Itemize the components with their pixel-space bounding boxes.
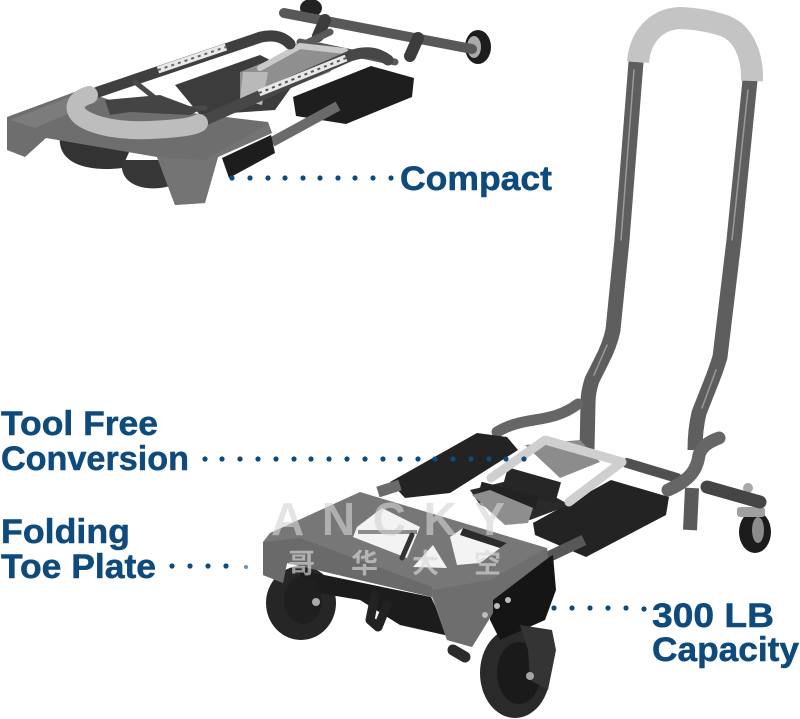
dark wheels under plate — [60, 135, 170, 188]
plate bolts — [482, 597, 511, 618]
front wheel tyre — [480, 628, 550, 718]
left folded tube — [98, 36, 290, 92]
grey foam grip — [76, 95, 199, 130]
dark detail inside grip — [105, 95, 200, 115]
label: compact — [229, 160, 552, 198]
dotted leader: compact — [229, 175, 394, 181]
black hinge bracket — [222, 135, 275, 178]
heading: tool free conversion: Tool Free — [1, 405, 158, 443]
grey support tube — [272, 106, 338, 142]
heading: 300 lb capacity — [652, 597, 799, 669]
left wheel hub — [284, 576, 322, 624]
watermark: 华 — [351, 549, 378, 579]
heading: tool free conversion: Conversion — [1, 440, 189, 478]
black frame bracket — [490, 555, 556, 640]
black platform pad — [293, 66, 414, 124]
toe plate — [7, 90, 272, 205]
handle tubes — [587, 62, 636, 450]
light grey fold handle — [260, 46, 345, 68]
dotted leader: tool free conversion — [202, 456, 527, 462]
wheel fork — [520, 625, 556, 690]
heading: folding toe plate — [1, 513, 156, 586]
heading: 300 lb capacity: 300 LB — [652, 597, 774, 635]
upright hand truck — [263, 18, 771, 718]
lower frame tube — [548, 540, 584, 557]
folded compact cart — [7, 0, 491, 205]
label: tool free conversion — [1, 405, 527, 478]
rear caster wheels — [300, 0, 491, 64]
heading: 300 lb capacity: Capacity — [652, 631, 799, 669]
label: folding toe plate — [1, 513, 248, 586]
left rear wheel — [266, 566, 336, 640]
heading: folding toe plate: Toe Plate — [1, 548, 156, 586]
light foam handle grip — [638, 18, 752, 81]
tube highlights — [594, 70, 748, 408]
heading: folding toe plate: Folding — [1, 513, 130, 551]
watermark: 大 — [412, 549, 439, 579]
curved rear rails — [497, 404, 578, 432]
watermark: ANCKY — [271, 493, 505, 545]
dotted leader: 300 lb capacity — [551, 605, 647, 612]
heading: compact: Compact — [400, 160, 552, 198]
central rollers — [470, 440, 600, 525]
rear caster — [737, 483, 771, 553]
underside mechanism — [300, 570, 449, 636]
watermark: 哥 — [288, 549, 315, 579]
watermark — [271, 493, 505, 579]
sticker labels — [158, 47, 346, 93]
rear axle — [707, 487, 760, 502]
frame rails — [296, 32, 395, 62]
light grey release handle — [491, 440, 622, 502]
toe plate — [263, 492, 548, 647]
dotted leader: folding toe plate — [169, 563, 248, 569]
toe plate windows — [353, 508, 507, 568]
black left pad — [390, 433, 518, 498]
rear axle — [284, 13, 472, 49]
inner mechanism — [175, 55, 300, 115]
label: 300 lb capacity — [551, 597, 799, 669]
right folded tube — [205, 53, 388, 120]
rear post — [690, 488, 692, 530]
watermark: 空 — [474, 549, 501, 579]
heading: tool free conversion — [1, 405, 189, 478]
black right pad — [533, 480, 669, 557]
